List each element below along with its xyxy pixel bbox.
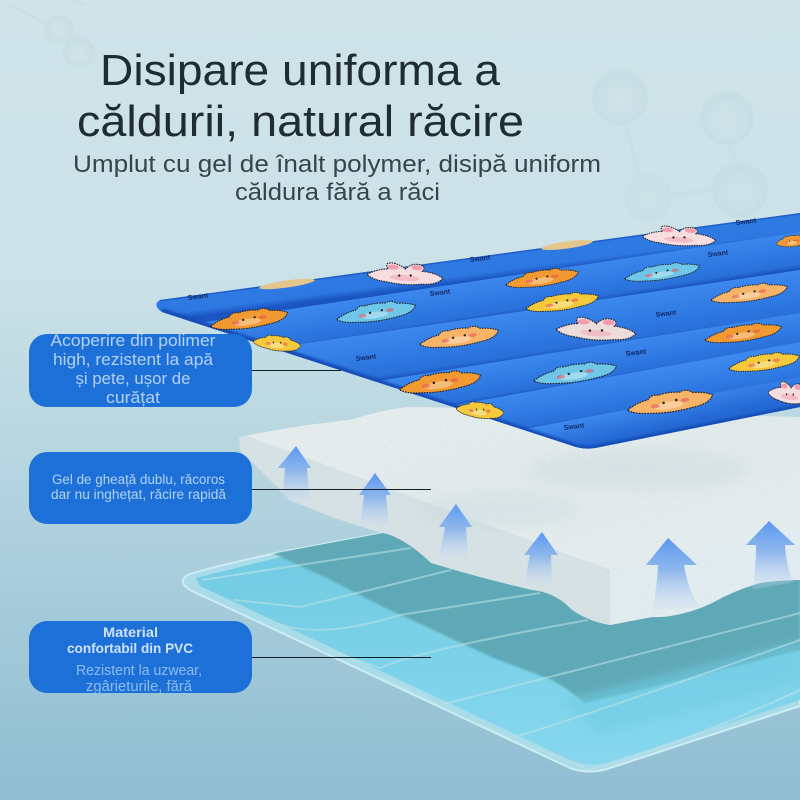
brand marks: Swant (429, 288, 451, 298)
brand marks: Swant (469, 254, 491, 264)
callout 3: PVC: zgârieturile, fără (86, 678, 193, 695)
brand marks: Swant (707, 249, 729, 259)
layer: PVC gel pad (183, 500, 800, 772)
callout 1: polymer cover: și pete, ușor de (76, 369, 190, 388)
callout 1: polymer cover: high, rezistent la apă (53, 350, 214, 369)
brand marks: Swant (563, 422, 585, 432)
callout 3: PVC: Material (103, 624, 158, 640)
brand marks: Swant (355, 353, 377, 363)
callout 3: PVC: confortabil din PVC (67, 640, 193, 656)
layer: ice gel foam (230, 400, 800, 630)
callout 2: ice gel: dar nu inghețat, răcire rapidă (51, 487, 226, 502)
cartoon stickers (209, 224, 800, 421)
callout 2: ice gel (29, 452, 431, 524)
arrow 6 (746, 521, 795, 590)
title: Disipare uniforma a (100, 46, 501, 95)
cover ridges (156, 213, 800, 449)
brand marks: Swant (735, 217, 757, 227)
callout 1: polymer cover: curățat (106, 388, 160, 407)
subtitle (73, 151, 601, 206)
arrow 2 (359, 473, 391, 527)
callout 2: ice gel: Gel de gheață dublu, răcoros (52, 472, 225, 487)
brand marks: Swant (655, 309, 677, 319)
brand marks: Swant (187, 292, 209, 302)
brand marks (187, 217, 757, 432)
callout 3: PVC: Rezistent la uzwear, (76, 662, 202, 679)
callout 1: polymer cover (29, 331, 341, 407)
heat arrows (278, 446, 795, 610)
arrow 4 (524, 532, 558, 585)
title: căldurii, natural răcire (77, 97, 524, 146)
title (77, 46, 524, 146)
subtitle: Umplut cu gel de înalt polymer, disipă uniform (73, 151, 601, 178)
arrow 3 (439, 504, 472, 558)
layer: blue polymer cover (156, 213, 800, 449)
callout 1: polymer cover: Acoperire din polimer (50, 331, 216, 350)
subtitle: căldura fără a răci (235, 179, 440, 206)
arrow 5 (646, 538, 700, 610)
brand marks: Swant (625, 348, 647, 358)
decorative molecules (10, 0, 768, 221)
arrow 1 (278, 446, 311, 502)
callout 3: PVC (29, 621, 431, 695)
